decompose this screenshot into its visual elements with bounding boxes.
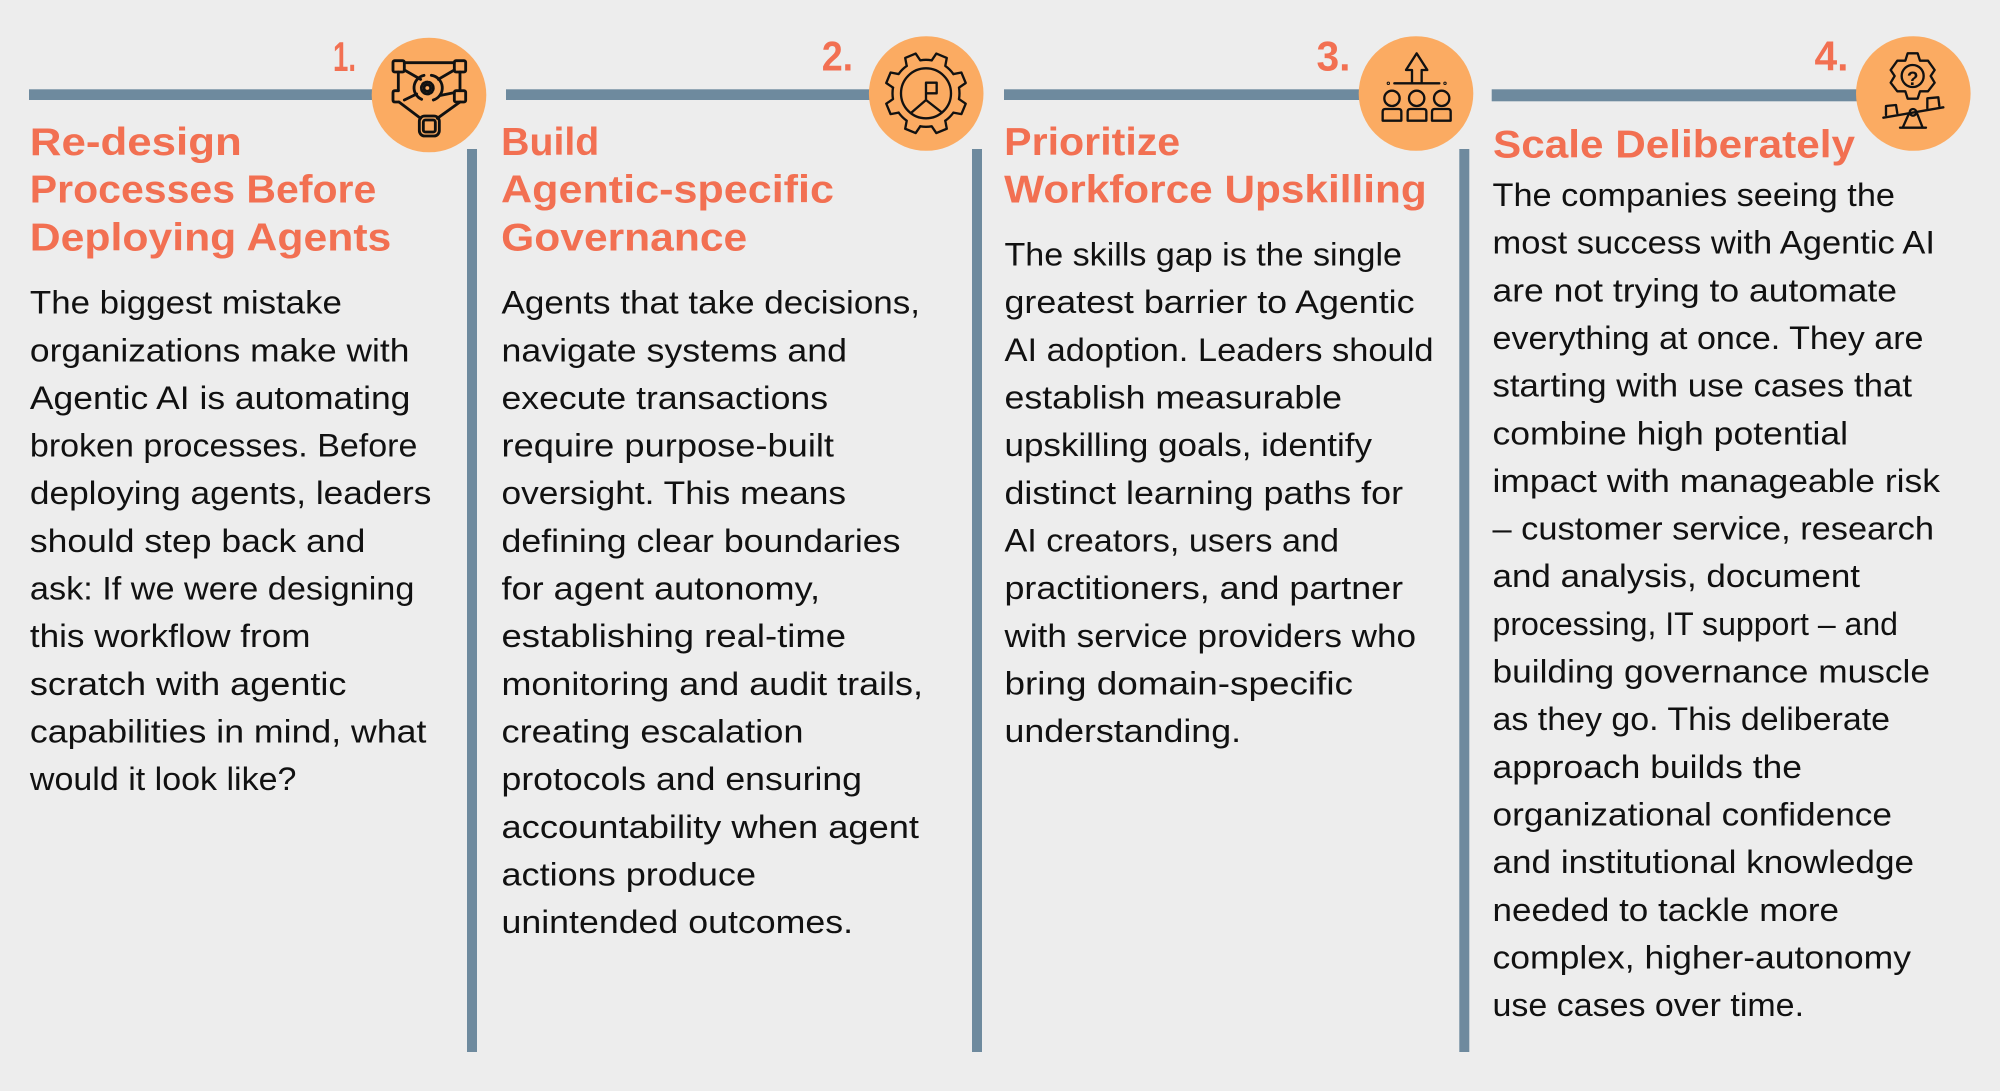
- heading 2: Build: [501, 121, 599, 164]
- body text 4: and institutional knowledge: [1492, 844, 1914, 880]
- body text 1: broken processes. Before: [30, 428, 417, 464]
- icon: gear with flag: [869, 36, 984, 151]
- heading 1: Re-design: [30, 121, 242, 164]
- body text 3: AI creators, users and: [1004, 522, 1339, 558]
- body text 1: capabilities in mind, what: [30, 713, 427, 749]
- body text 4: as they go. This deliberate: [1492, 701, 1890, 737]
- body text 2: Agents that take decisions,: [502, 285, 920, 321]
- body text 1: organizations make with: [30, 332, 409, 368]
- body text 2: [502, 285, 923, 940]
- heading 1: Processes Before: [30, 169, 376, 212]
- heading 2: [501, 121, 834, 260]
- body text 4: – customer service, research: [1492, 511, 1934, 547]
- heading 4: Scale Deliberately: [1493, 123, 1856, 166]
- body text 4: organizational confidence: [1492, 796, 1892, 832]
- body text 4: needed to tackle more: [1492, 892, 1839, 928]
- step number 2: 2.: [822, 33, 853, 80]
- body text 4: building governance muscle: [1492, 654, 1930, 690]
- body text 2: protocols and ensuring: [502, 761, 862, 797]
- body text 2: monitoring and audit trails,: [502, 666, 923, 702]
- step number 4: 4.: [1814, 33, 1848, 80]
- body text 2: for agent autonomy,: [502, 570, 820, 606]
- heading 3: Prioritize: [1004, 121, 1180, 164]
- body text 4: approach builds the: [1492, 749, 1802, 785]
- body text 3: AI adoption. Leaders should: [1004, 332, 1434, 368]
- body text 4: processing, IT support – and: [1492, 606, 1898, 642]
- heading 1: Deploying Agents: [30, 217, 391, 260]
- body text 2: establishing real-time: [502, 618, 846, 654]
- body text 4: are not trying to automate: [1492, 272, 1897, 308]
- body text 4: [1492, 177, 1941, 1023]
- panel: step 3 workforce upskilling: [1003, 33, 1473, 1052]
- body text 2: accountability when agent: [502, 809, 919, 845]
- body text 4: impact with manageable risk: [1492, 463, 1941, 499]
- body text 1: this workflow from: [30, 618, 310, 654]
- body text 3: [1003, 236, 1434, 749]
- heading 2: Governance: [501, 217, 747, 260]
- body text 3: bring domain-specific: [1004, 665, 1353, 701]
- body text 1: ask: If we were designing: [30, 570, 414, 606]
- panel: step 4 scale deliberately: [1492, 33, 1971, 1023]
- body text 1: Agentic AI is automating: [30, 380, 410, 416]
- body text 1: scratch with agentic: [30, 666, 346, 702]
- body text 3: distinct learning paths for: [1004, 475, 1403, 511]
- step number 1: 1.: [333, 33, 356, 80]
- body text 4: use cases over time.: [1492, 987, 1804, 1023]
- body text 3: The skills gap is the single: [1004, 236, 1402, 272]
- body text 1: deploying agents, leaders: [30, 475, 431, 511]
- body text 4: most success with Agentic AI: [1492, 225, 1935, 261]
- body text 1: should step back and: [30, 523, 365, 559]
- body text 4: and analysis, document: [1492, 558, 1860, 594]
- body text 3: with service providers who: [1003, 618, 1416, 654]
- heading 2: Agentic-specific: [501, 169, 834, 212]
- body text 4: complex, higher-autonomy: [1492, 939, 1911, 975]
- body text 2: oversight. This means: [502, 475, 846, 511]
- body text 2: navigate systems and: [502, 332, 847, 368]
- body text 3: greatest barrier to Agentic: [1004, 284, 1414, 320]
- body text 2: defining clear boundaries: [502, 523, 900, 559]
- body text 3: upskilling goals, identify: [1004, 427, 1372, 463]
- body text 1: [29, 285, 431, 797]
- body text 2: creating escalation: [502, 713, 804, 749]
- heading 1: [30, 121, 391, 260]
- body text 2: unintended outcomes.: [502, 904, 853, 940]
- body text 4: everything at once. They are: [1492, 320, 1924, 356]
- body text 3: practitioners, and partner: [1004, 570, 1403, 606]
- body text 4: The companies seeing the: [1492, 177, 1895, 213]
- heading 3: [1004, 121, 1427, 212]
- body text 3: establish measurable: [1004, 380, 1342, 416]
- body text 1: would it look like?: [29, 761, 296, 797]
- body text 4: combine high potential: [1492, 415, 1848, 451]
- step number 3: 3.: [1316, 33, 1350, 80]
- question mark: ?: [1907, 69, 1919, 90]
- panel: step 2 agentic governance: [501, 33, 984, 1052]
- body text 2: actions produce: [502, 856, 756, 892]
- body text 2: require purpose-built: [502, 428, 834, 464]
- icon: people with upward arrow: [1359, 36, 1473, 151]
- body text 2: execute transactions: [502, 380, 828, 416]
- body text 3: understanding.: [1004, 713, 1241, 749]
- icon: gear with question mark above seesaw: [1856, 36, 1971, 151]
- body text 4: starting with use cases that: [1492, 368, 1912, 404]
- panel: step 1 re-design processes: [29, 33, 486, 1052]
- body text 1: The biggest mistake: [30, 285, 342, 321]
- icon: process network with gear: [372, 38, 486, 152]
- heading 3: Workforce Upskilling: [1004, 169, 1427, 212]
